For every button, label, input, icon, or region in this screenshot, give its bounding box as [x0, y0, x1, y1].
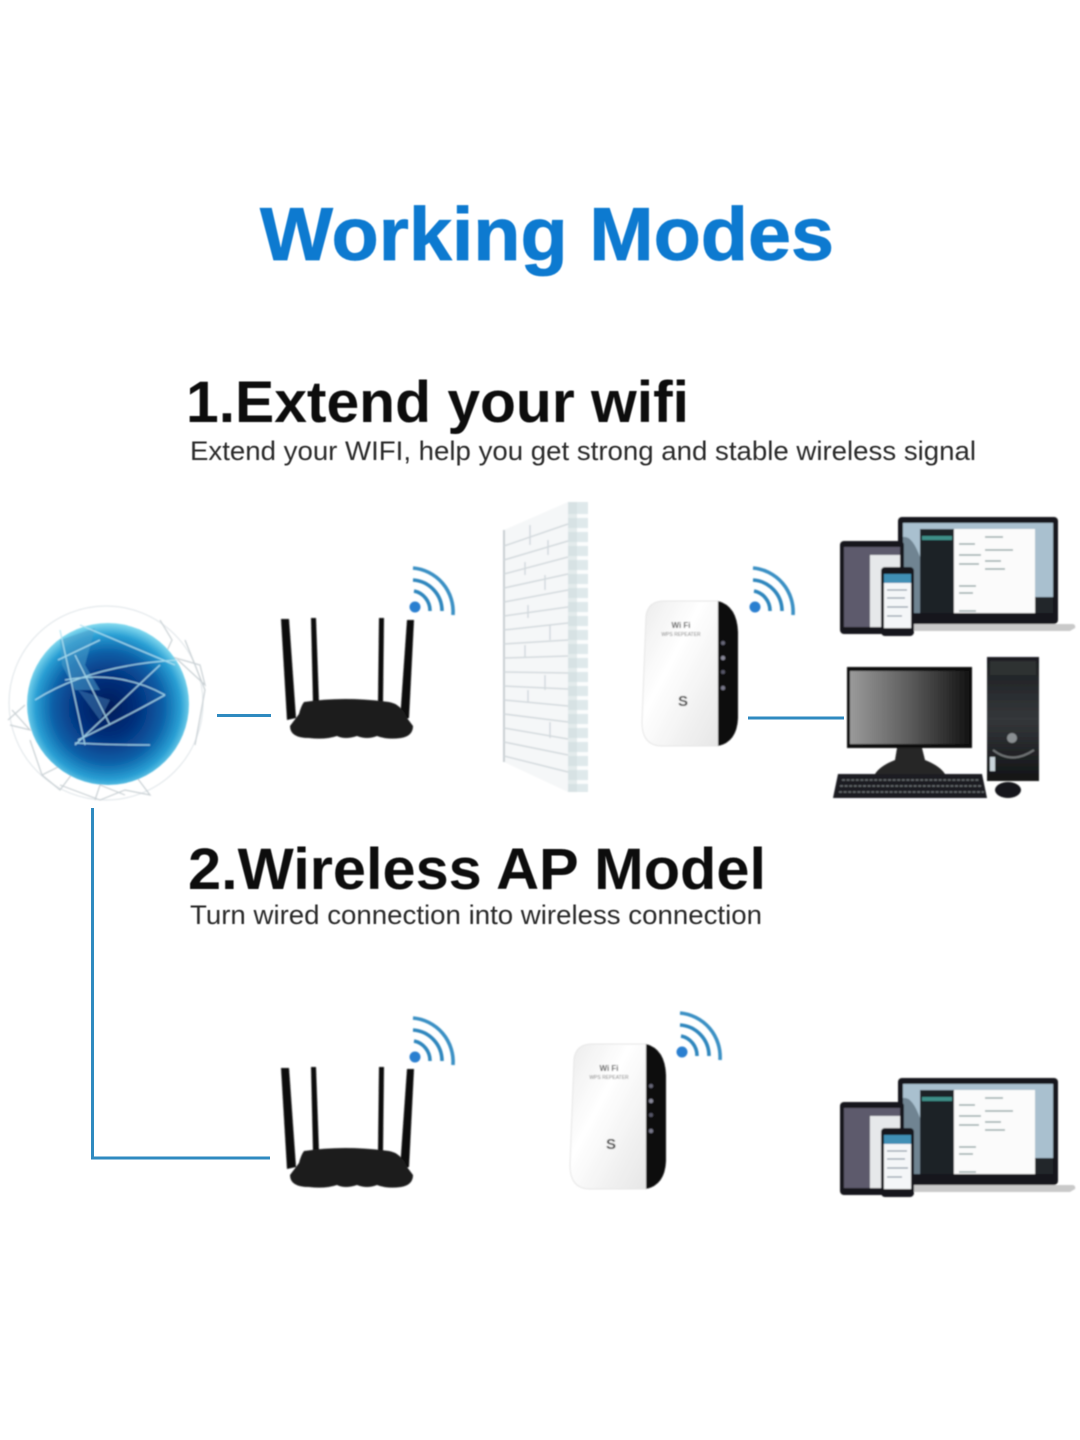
- connector: extender to desktop: [748, 716, 844, 720]
- icon: wifi signal router bottom: [410, 1018, 453, 1065]
- icon: globe: [8, 606, 205, 800]
- subheading: wireless AP model: Turn wired connection into wireless connection: [190, 900, 762, 930]
- icon: router top: [281, 618, 414, 739]
- icon: wifi signal extender top: [750, 568, 793, 615]
- heading: extend your wifi: 1.Extend your wifi: [186, 370, 689, 435]
- icon: wifi signal router top: [410, 568, 453, 615]
- icon: extender bottom: [570, 1044, 666, 1189]
- icon: desktop computer: [833, 657, 1039, 798]
- icon: laptop tablet phone top: [840, 517, 1075, 636]
- icon: wifi signal extender bottom: [676, 1013, 720, 1060]
- heading: wireless AP model: 2.Wireless AP Model: [188, 837, 766, 902]
- title: Working Modes: [260, 192, 834, 276]
- connector: internet to router bottom: [92, 808, 270, 1158]
- icon: brick wall: [504, 502, 588, 792]
- subheading: extend your wifi: Extend your WIFI, help you get strong and stable wireless signal: [190, 436, 976, 466]
- connector: internet to router: [217, 714, 271, 717]
- icon: extender top: [642, 601, 738, 746]
- icon: router bottom: [281, 1067, 414, 1188]
- icon: laptop tablet phone bottom: [840, 1078, 1075, 1197]
